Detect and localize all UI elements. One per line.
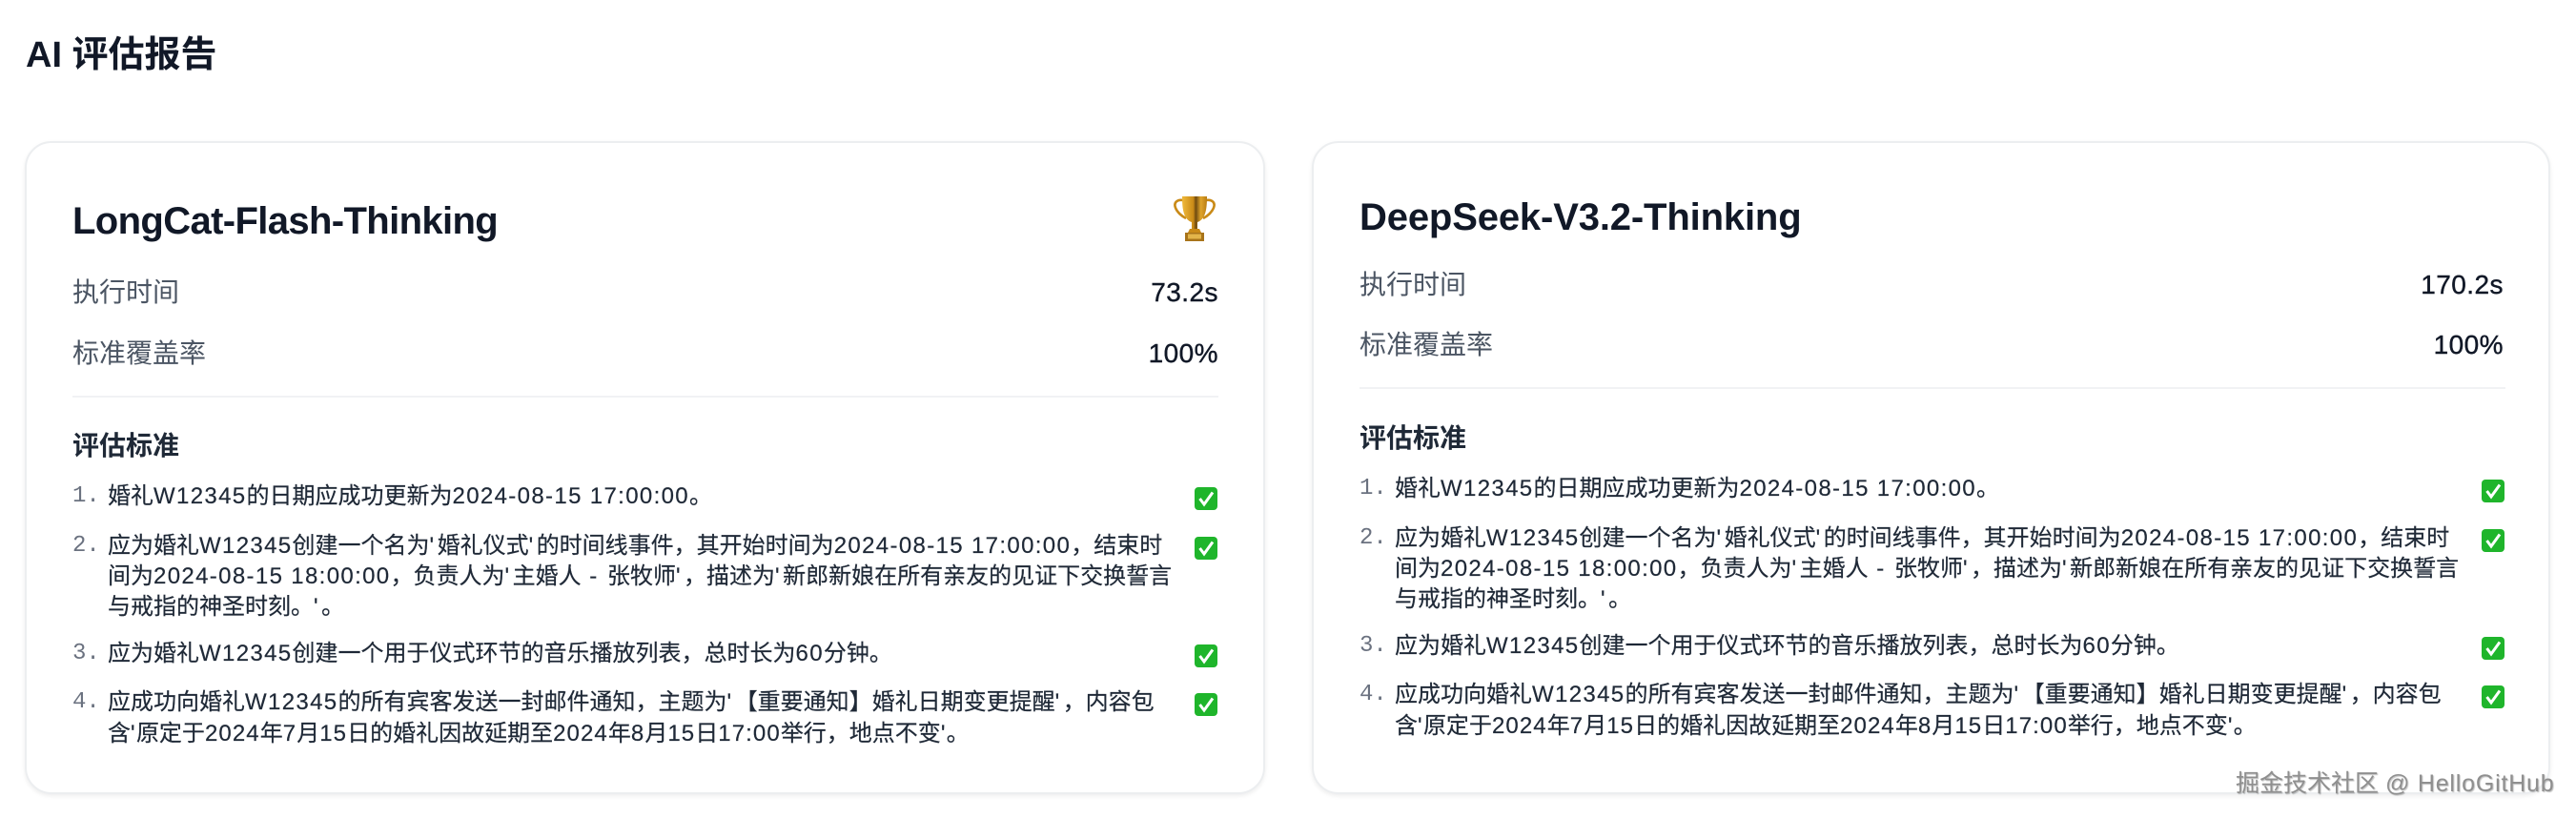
criterion 4: 应成功向婚礼W12345的所有宾客发送一封邮件通知，主题为'【重要通知】婚礼日期变更提醒'，内容包: [1395, 682, 2442, 707]
criterion 3: 应为婚礼W12345创建一个用于仪式环节的音乐播放列表，总时长为60分钟。: [1395, 633, 2179, 659]
criterion 4: 4.: [72, 689, 100, 715]
criterion 2: 间为2024-08-15 18:00:00，负责人为'主婚人 - 张牧师'，描述为'新郎新娘在所有亲友的见证下交换誓言: [1395, 556, 2459, 582]
criterion 3: 3.: [72, 641, 100, 666]
criterion 2: 应为婚礼W12345创建一个名为'婚礼仪式'的时间线事件，其开始时间为2024-08-15 17:00:00，结束时: [1395, 525, 2449, 551]
criterion 3: 应为婚礼W12345创建一个用于仪式环节的音乐播放列表，总时长为60分钟。: [108, 641, 892, 666]
criterion 1: 婚礼W12345的日期应成功更新为2024-08-15 17:00:00。: [108, 483, 712, 509]
icon: trophy: [1174, 196, 1216, 241]
metric value: coverage: 100%: [1149, 338, 1218, 368]
criterion 3: [1360, 633, 2504, 660]
panel: LongCat-Flash-Thinking: [25, 141, 1265, 794]
criterion 3: [72, 641, 1217, 667]
criterion 1: [72, 483, 1217, 510]
criterion 4: [72, 689, 1217, 746]
metric label: coverage: 标准覆盖率: [1360, 330, 1493, 359]
criterion 4: 应成功向婚礼W12345的所有宾客发送一封邮件通知，主题为'【重要通知】婚礼日期变更提醒'，内容包: [108, 689, 1155, 715]
criterion 2: [72, 533, 1217, 620]
criterion 4: 含'原定于2024年7月15日的婚礼因故延期至2024年8月15日17:00举行，地点不变'。: [1395, 713, 2257, 739]
criterion 1: 婚礼W12345的日期应成功更新为2024-08-15 17:00:00。: [1395, 476, 1999, 501]
criterion 4: 4.: [1360, 682, 1387, 707]
criterion 1: 1.: [1360, 476, 1387, 501]
criterion 1: 1.: [72, 483, 100, 509]
panel: DeepSeek-V3.2-Thinking: [1312, 141, 2550, 794]
metric value: coverage: 100%: [2434, 330, 2504, 359]
criterion 1: [1360, 476, 2504, 502]
criterion 2: 与戒指的神圣时刻。'。: [1395, 586, 1631, 612]
metric label: execution time: 执行时间: [72, 277, 179, 307]
criterion 2: [1360, 525, 2504, 612]
criteria heading: 评估标准: [1360, 423, 1466, 453]
criterion 4: 含'原定于2024年7月15日的婚礼因故延期至2024年8月15日17:00举行，地点不变'。: [108, 721, 970, 746]
criterion 3: 3.: [1360, 633, 1387, 659]
criterion 2: 2.: [72, 533, 100, 559]
criterion 2: 应为婚礼W12345创建一个名为'婚礼仪式'的时间线事件，其开始时间为2024-08-15 17:00:00，结束时: [108, 533, 1162, 559]
criterion 4: [1360, 682, 2504, 739]
title: AI 评估报告: [26, 35, 217, 75]
criterion 2: 间为2024-08-15 18:00:00，负责人为'主婚人 - 张牧师'，描述为'新郎新娘在所有亲友的见证下交换誓言: [108, 563, 1172, 589]
watermark: 掘金技术社区 @ HelloGitHub: [2236, 770, 2554, 797]
metric value: execution time: 170.2s: [2421, 270, 2504, 299]
model name: DeepSeek-V3.2-Thinking: [1360, 196, 1802, 238]
metric label: execution time: 执行时间: [1360, 270, 1466, 299]
model name: LongCat-Flash-Thinking: [72, 200, 498, 242]
metric value: execution time: 73.2s: [1151, 277, 1218, 307]
criteria heading: 评估标准: [72, 431, 179, 460]
criterion 2: 2.: [1360, 525, 1387, 551]
criterion 2: 与戒指的神圣时刻。'。: [108, 594, 344, 620]
metric label: coverage: 标准覆盖率: [72, 338, 206, 368]
